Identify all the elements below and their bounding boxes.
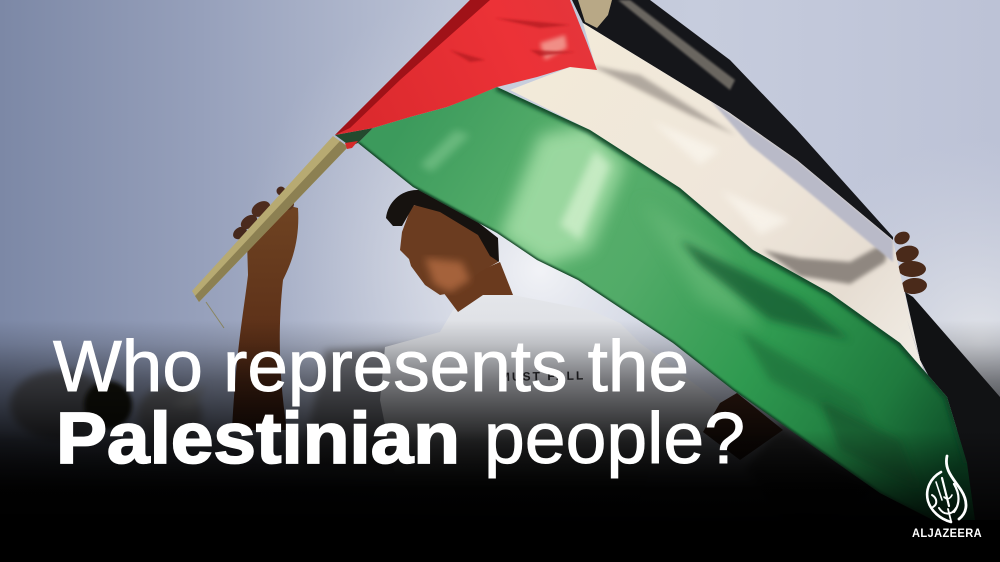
hair (386, 190, 499, 262)
red triangle (335, 0, 597, 135)
green stripe (358, 87, 975, 520)
faded crowd silhouettes (10, 345, 870, 530)
black stripe, upper band (572, 0, 893, 246)
t-shirt print text: MUST FALL (500, 369, 585, 384)
raised arm and hand (231, 186, 298, 430)
white t-shirt (380, 295, 720, 500)
green stripe folds and sheen (358, 87, 967, 520)
bottom dark gradient over the photo (0, 320, 1000, 562)
red fold shadows (450, 18, 575, 62)
bottom fade across the flag (0, 430, 1000, 562)
face highlight (425, 258, 470, 292)
green corner below the hem (335, 128, 373, 146)
distant hand gripping the flag (892, 229, 928, 295)
small red tail at the pole (345, 141, 358, 149)
head (400, 205, 498, 295)
headline line 2 (56, 399, 745, 479)
logo wordmark: ALJAZEERA (912, 528, 982, 540)
headline line 1: Who represents the (53, 327, 689, 407)
gold glint at the flag top (578, 0, 612, 28)
wooden flag pole (192, 136, 348, 328)
black stripe sheen (618, 0, 735, 90)
white stripe (510, 23, 957, 430)
Al Jazeera logo (912, 456, 982, 540)
red hem (335, 0, 490, 135)
headline line 2: people? (484, 399, 745, 479)
photo: man holding the flag (10, 136, 870, 530)
headline line 2: Palestinian (56, 399, 460, 479)
neck (440, 262, 513, 312)
headline (53, 327, 745, 479)
dark crowd head (84, 381, 132, 429)
black stripe, right flap (905, 292, 1000, 520)
icon: calligraphic drop (927, 456, 966, 522)
red sheen (540, 35, 567, 60)
right forearm (703, 393, 783, 460)
Palestinian flag (335, 0, 1000, 520)
white stripe shading (595, 64, 929, 376)
